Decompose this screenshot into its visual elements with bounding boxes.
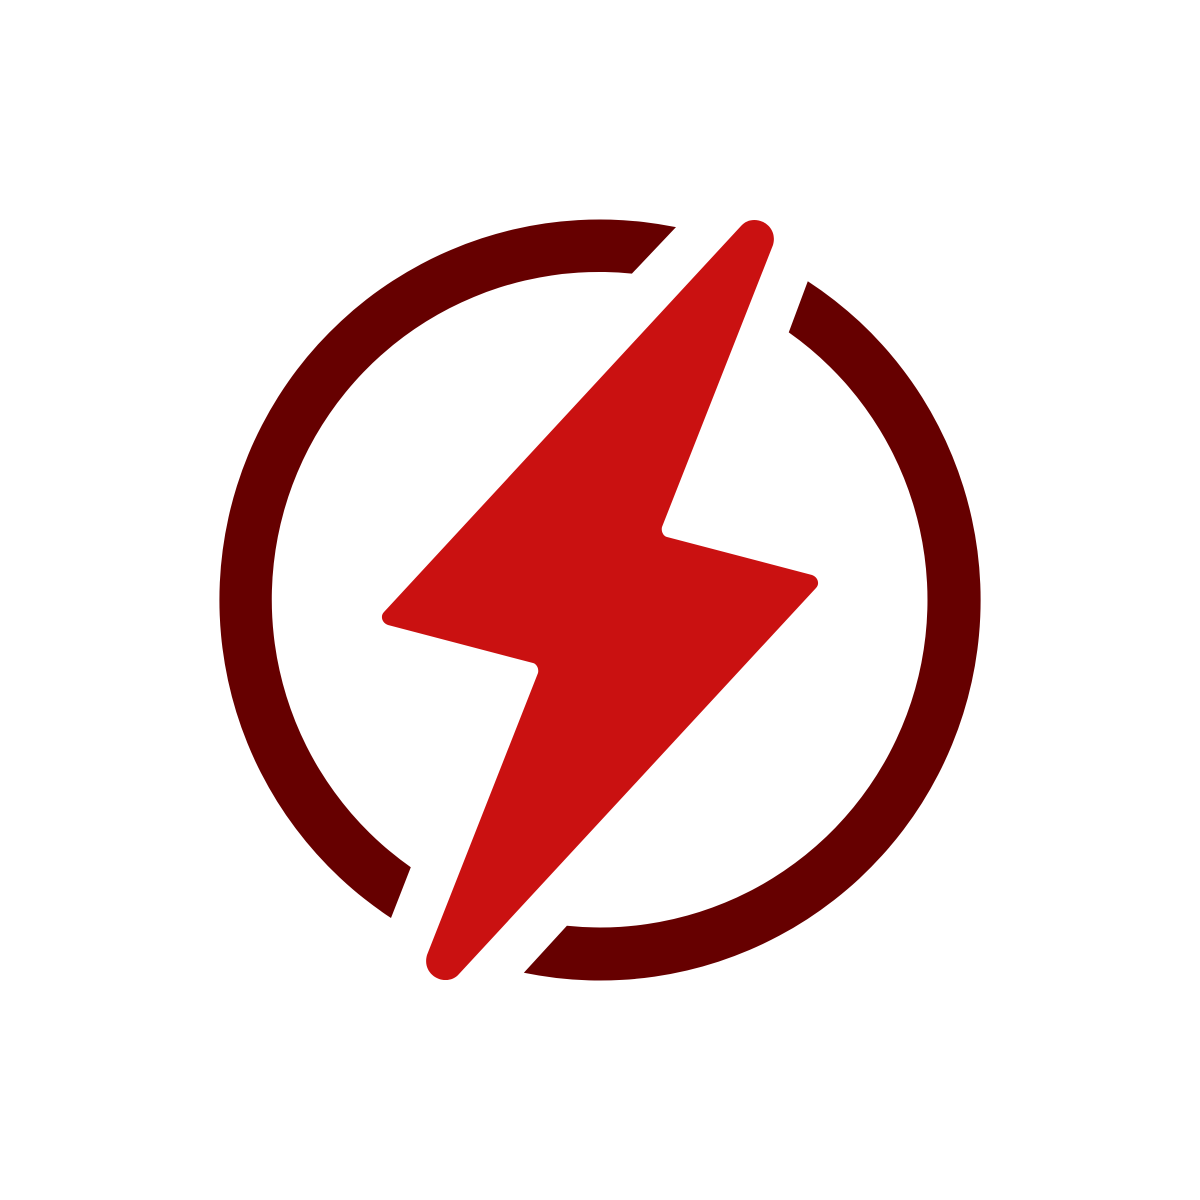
lightning bolt (382, 220, 818, 980)
right ring arc (524, 281, 981, 981)
left ring arc (219, 219, 676, 918)
